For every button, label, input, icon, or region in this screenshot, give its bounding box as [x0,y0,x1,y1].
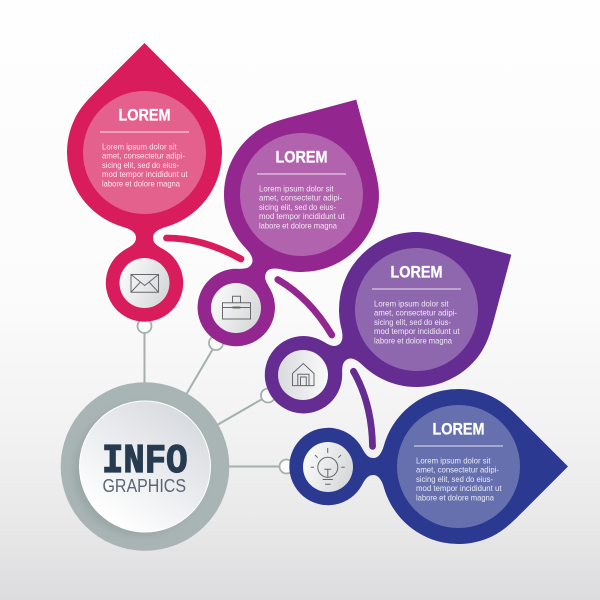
text block: violet: LOREM [390,263,442,282]
text block: pink: Lorem ipsum dolor sit [102,142,177,151]
text block: blue: Lorem ipsum dolor sit [416,456,491,465]
text block: pink: LOREM [118,106,170,125]
text block: magenta: LOREM [276,148,328,167]
text block: blue: labore et dolore magna [416,493,494,502]
text block: magenta: Lorem ipsum dolor sit [259,184,334,193]
text block: blue: sicing elit, sed do eius- [416,475,493,484]
panel: pink drop [67,43,241,322]
text block: magenta: labore et dolore magna [259,221,337,230]
central circle [61,382,229,551]
text block: pink: labore et dolore magna [102,179,180,188]
icon: briefcase [211,283,261,333]
panel: blue drop [289,389,568,544]
icon: house [278,350,328,400]
text block: violet: mod tempor incididunt ut [374,327,460,336]
text block: blue: LOREM [432,420,484,439]
subtitle: GRAPHICS: GRAPHICS [102,476,186,496]
panel: violet drop [231,188,560,478]
text block: blue [414,420,503,502]
text block: pink: sicing elit, sed do eius- [102,161,179,170]
text block: pink: amet, consectetur adipi- [102,152,185,161]
text block: violet: labore et dolore magna [374,336,452,345]
icon: envelope [120,258,170,308]
icon: light bulb [303,442,353,492]
text block: violet: Lorem ipsum dolor sit [374,299,449,308]
text block: violet: amet, consectetur adipi- [374,309,457,318]
connector lines and rings [138,319,294,474]
text block: blue: amet, consectetur adipi- [416,466,499,475]
text block: pink [100,106,189,188]
text block: pink: mod tempor incididunt ut [102,170,188,179]
text block: magenta: sicing elit, sed do eius- [259,203,336,212]
text block: magenta [257,148,346,230]
text block: violet [372,263,461,345]
text block: magenta: amet, consectetur adipi- [259,194,342,203]
text block: blue: mod tempor incididunt ut [416,484,502,493]
text block: violet: sicing elit, sed do eius- [374,318,451,327]
panel: magenta drop [150,61,440,389]
text block: magenta: mod tempor incididunt ut [259,212,345,221]
title: INFO: INFO [102,439,188,485]
